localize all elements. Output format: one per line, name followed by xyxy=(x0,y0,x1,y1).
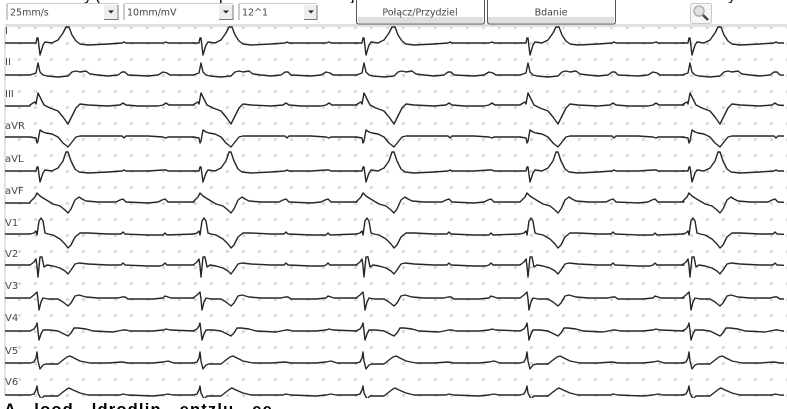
lead III: III xyxy=(5,89,14,100)
lead V5 xyxy=(5,346,787,369)
button: examination xyxy=(487,0,616,24)
lead V4: V4 xyxy=(5,313,18,324)
icon: magnifier xyxy=(690,4,712,24)
lead V5: V5 xyxy=(5,346,18,357)
lead I: I xyxy=(5,26,8,37)
lead V1 xyxy=(5,218,787,248)
lead II: II xyxy=(5,57,11,68)
lead I xyxy=(5,26,787,55)
lead V2: V2 xyxy=(5,249,18,260)
dropdown: layout xyxy=(239,4,317,20)
lead V3 xyxy=(5,281,787,310)
dropdown: amplitude scale xyxy=(124,4,233,20)
toolbar xyxy=(7,0,712,24)
lead III xyxy=(5,89,787,124)
dropdown: paper speed xyxy=(7,4,118,20)
lead V2 xyxy=(5,249,787,277)
lead aVR xyxy=(5,121,787,147)
dropdown: amplitude scale: 10mm/mV xyxy=(127,8,177,18)
button: assign: Połącz/Przydziel xyxy=(382,8,458,18)
lead II xyxy=(5,57,787,77)
lead aVF: aVF xyxy=(5,186,24,197)
lead aVL: aVL xyxy=(5,154,24,165)
lead V6 xyxy=(5,377,787,399)
button: examination: Bdanie xyxy=(535,8,568,18)
dropdown: paper speed: 25mm/s xyxy=(10,8,49,18)
lead V1: V1 xyxy=(5,218,18,229)
lead aVF xyxy=(5,186,787,213)
lead V6: V6 xyxy=(5,377,18,388)
dropdown: layout: 12^1 xyxy=(242,8,268,18)
lead V3: V3 xyxy=(5,281,18,292)
lead aVR: aVR xyxy=(5,121,25,132)
button: assign xyxy=(356,0,484,24)
clipped caption at top edge xyxy=(84,0,733,3)
lead V4 xyxy=(5,313,787,340)
lead aVL xyxy=(5,152,787,182)
